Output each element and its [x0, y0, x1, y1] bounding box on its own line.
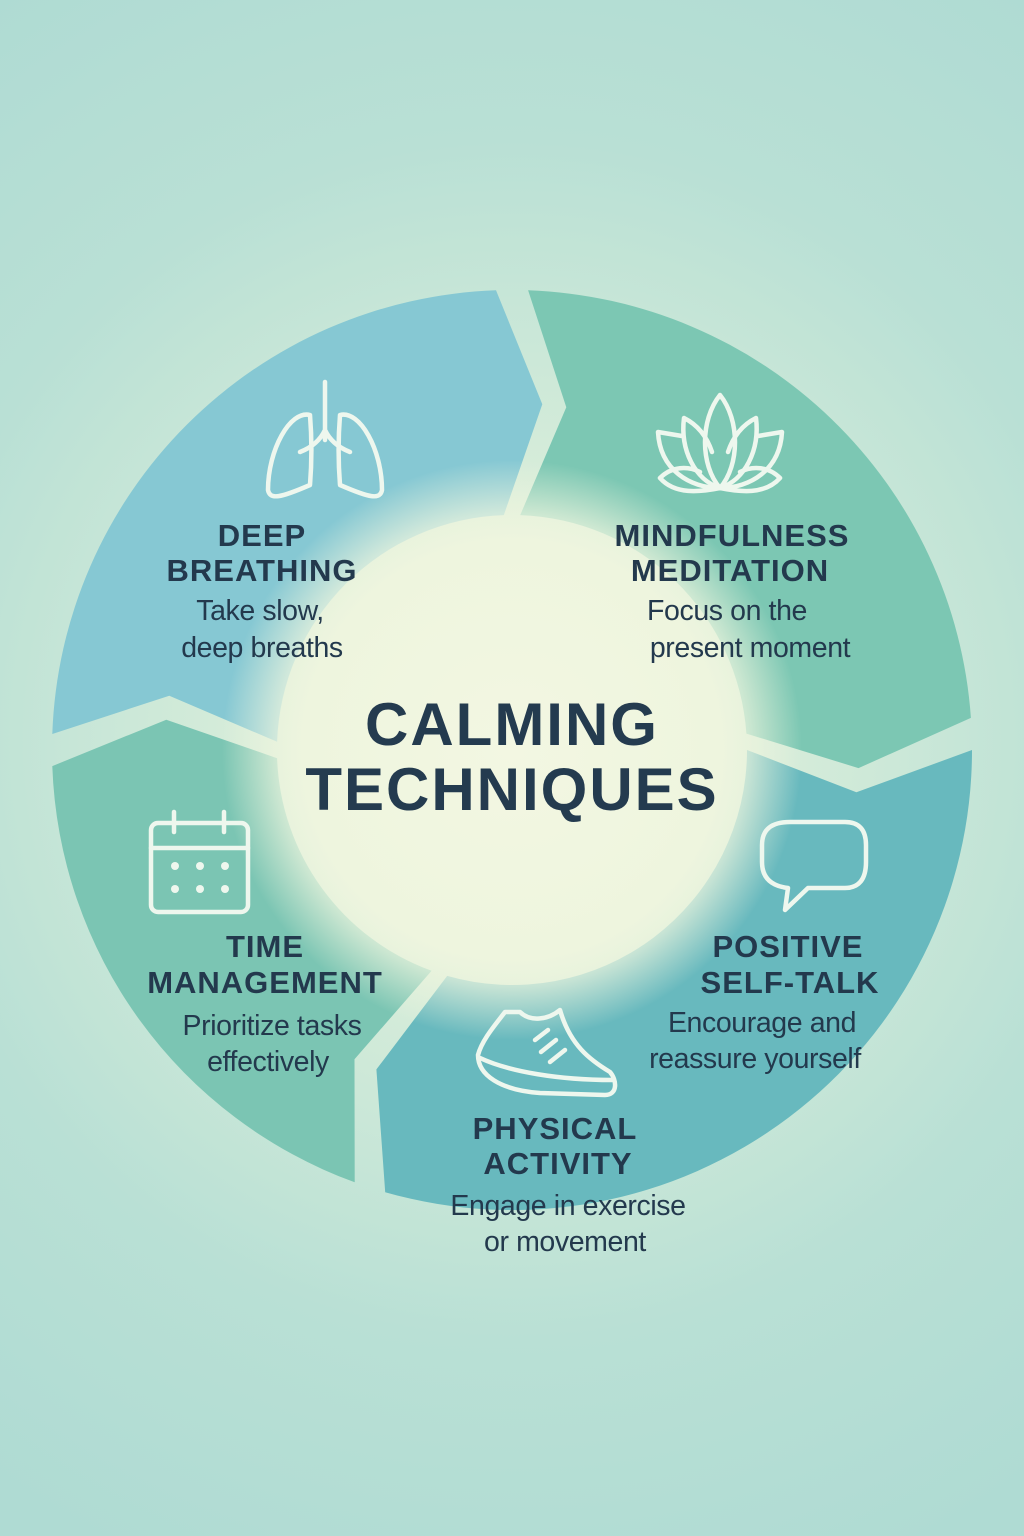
label: mindfulness meditation: MINDFULNESS — [615, 518, 849, 553]
label: mindfulness meditation: MEDITATION — [631, 553, 829, 588]
label: positive self-talk: reassure yourself — [649, 1043, 861, 1075]
label: deep breathing: DEEP — [218, 518, 306, 553]
segment: deep breathing — [52, 290, 542, 742]
segment: time management — [52, 720, 432, 1182]
title: CALMING — [365, 691, 659, 758]
label: deep breathing — [167, 518, 357, 664]
icon: speech bubble — [762, 822, 866, 910]
label: mindfulness meditation: Focus on the — [647, 595, 807, 627]
label: positive self-talk: POSITIVE — [713, 929, 863, 964]
label: time management — [147, 929, 383, 1078]
label: physical activity: Engage in exercise — [450, 1190, 686, 1222]
icon: lotus — [658, 395, 782, 491]
label: mindfulness meditation — [615, 518, 851, 664]
label: time management: TIME — [226, 929, 304, 964]
label: positive self-talk — [649, 929, 879, 1075]
label: positive self-talk: SELF-TALK — [701, 965, 879, 1000]
icon: shoe — [478, 1010, 615, 1095]
icon: calendar — [151, 812, 248, 912]
label: time management: effectively — [207, 1046, 330, 1078]
label: physical activity: PHYSICAL — [473, 1111, 637, 1146]
label: deep breathing: BREATHING — [167, 553, 357, 588]
label: time management: MANAGEMENT — [147, 965, 383, 1000]
label: physical activity — [450, 1111, 686, 1258]
label: deep breathing: Take slow, — [196, 595, 324, 627]
label: physical activity: ACTIVITY — [483, 1146, 633, 1181]
label: mindfulness meditation: present moment — [650, 632, 851, 664]
label: physical activity: or movement — [484, 1226, 646, 1258]
icon: lungs — [268, 382, 382, 496]
segment: mindfulness meditation — [520, 290, 971, 768]
title: TECHNIQUES — [305, 756, 719, 823]
label: time management: Prioritize tasks — [183, 1010, 362, 1042]
segment: positive self-talk and physical activity — [376, 750, 972, 1210]
label: positive self-talk: Encourage and — [668, 1007, 856, 1039]
title — [305, 691, 719, 823]
center glow circle — [222, 460, 802, 1040]
label: deep breathing: deep breaths — [181, 632, 343, 664]
